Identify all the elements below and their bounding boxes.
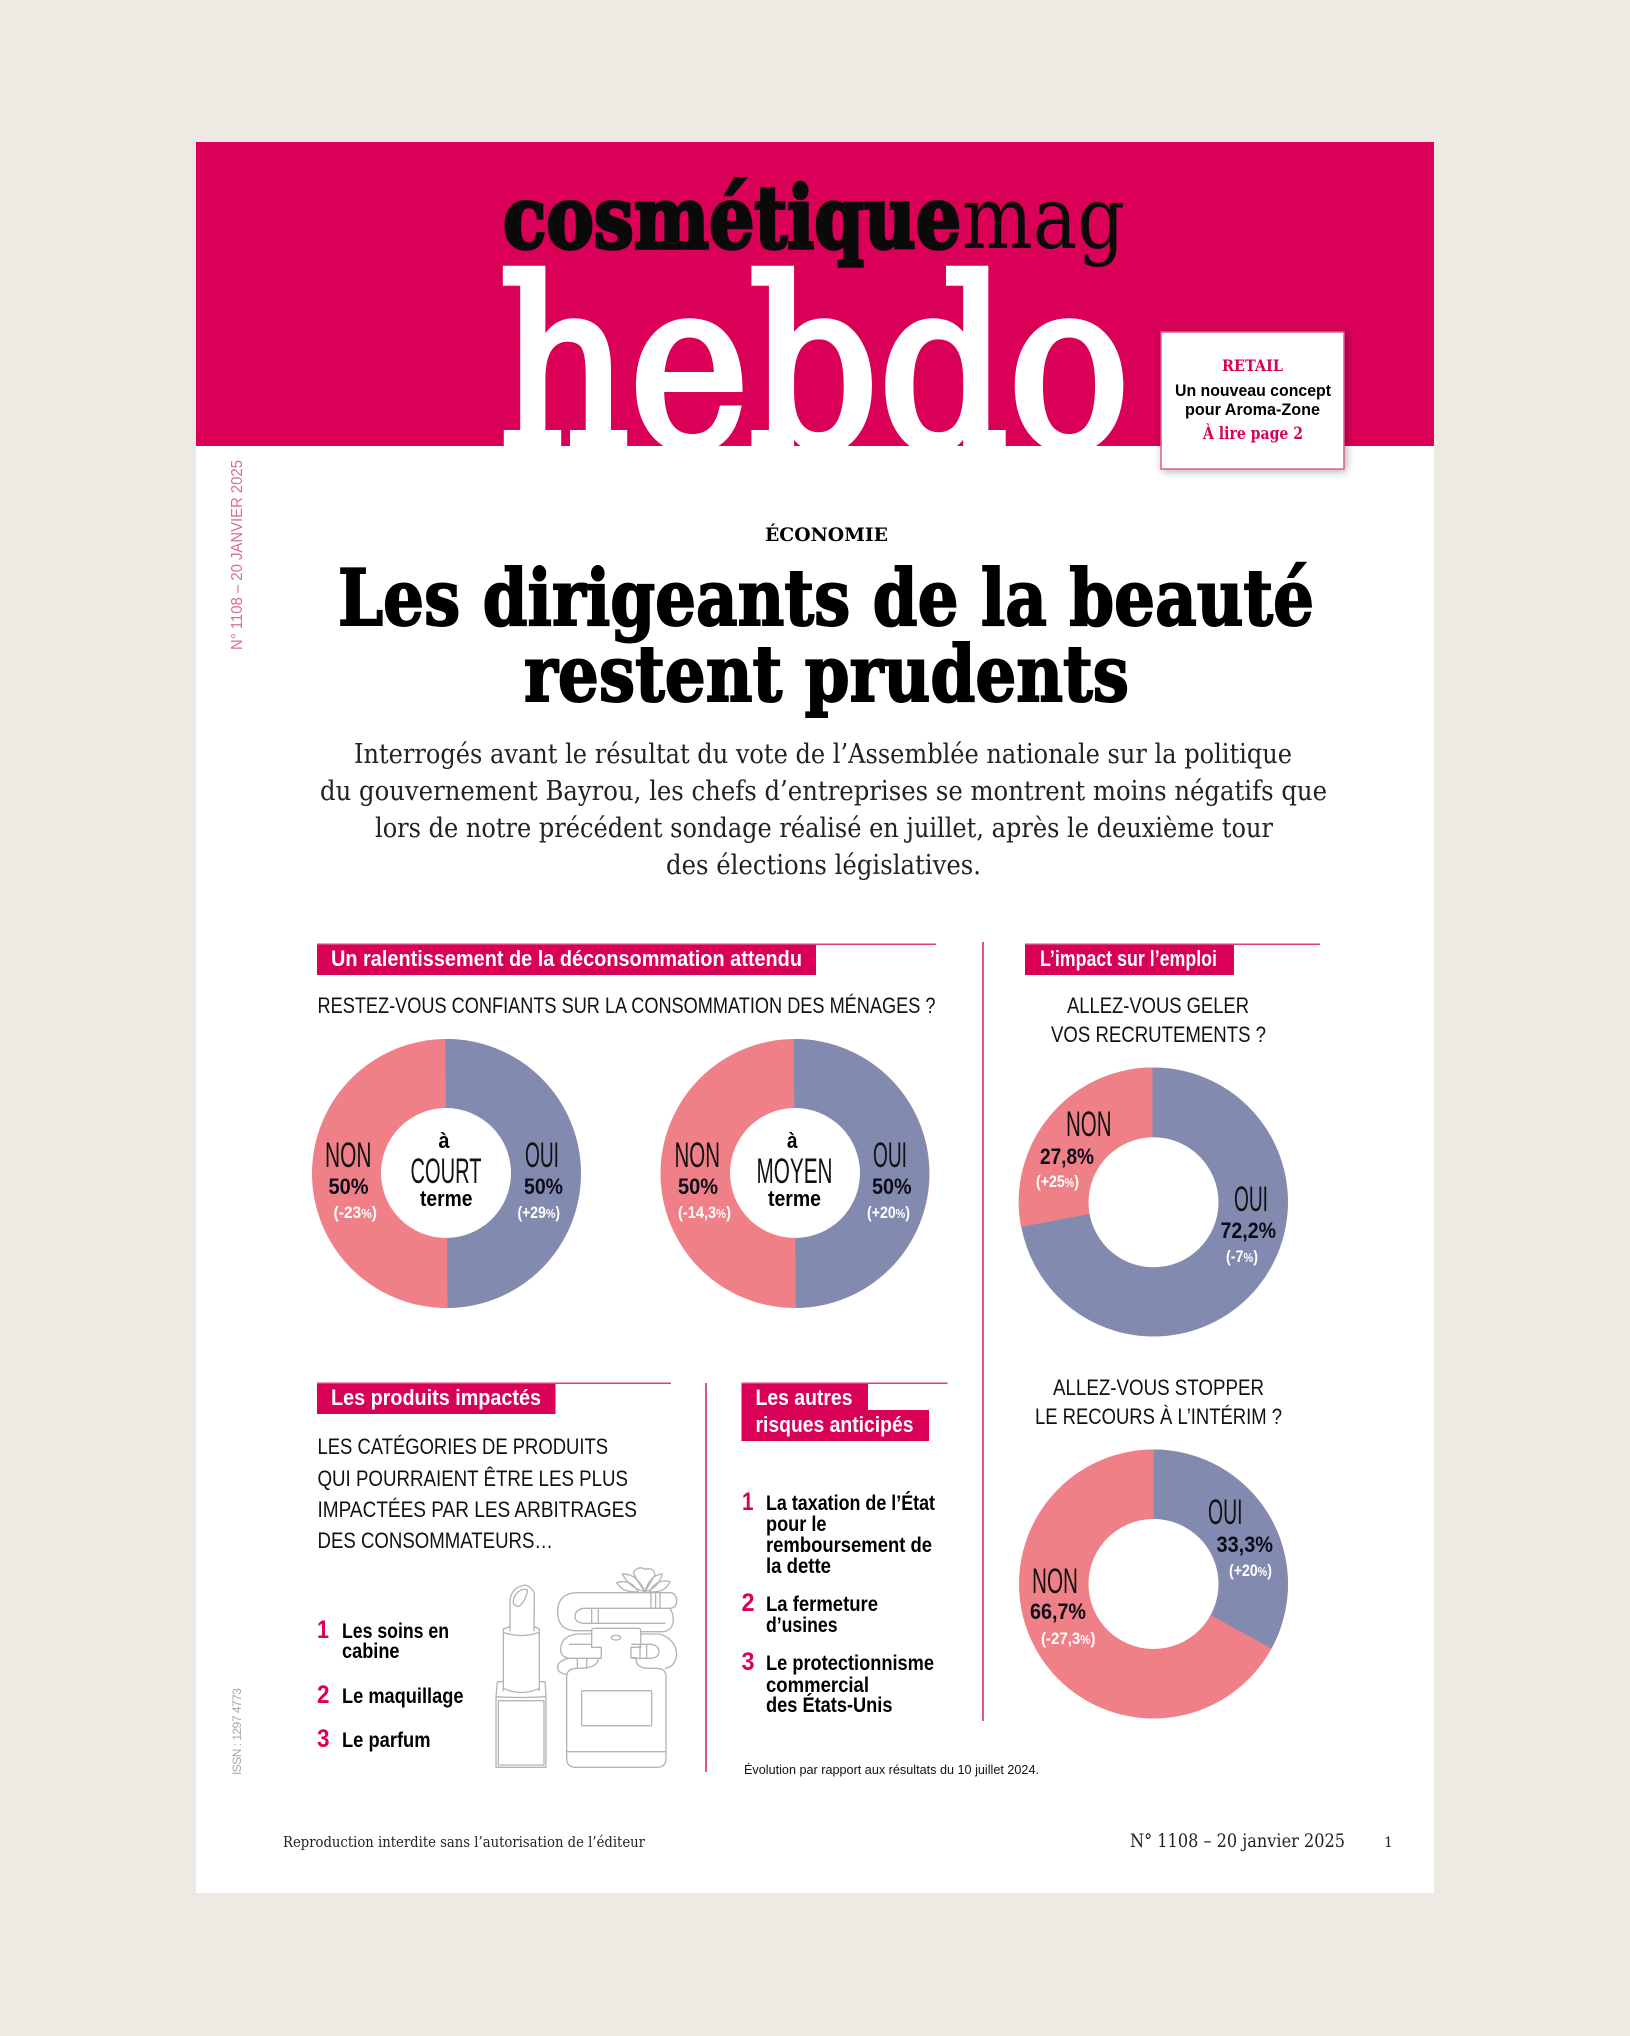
ranked list: produits: 3 [317, 1725, 330, 1753]
intro paragraph: des élections législatives. [666, 850, 981, 881]
donut chart: stopper intérim: 66,7% [1030, 1599, 1086, 1624]
donut chart: court terme: (-23%) [334, 1203, 377, 1222]
question: geler les recrutements: VOS RECRUTEMENTS ? [1051, 1022, 1266, 1047]
donut chart: moyen terme: NON [674, 1136, 720, 1175]
panel: autres risques [742, 1382, 948, 1717]
ranked list: risques: pour le [766, 1513, 826, 1536]
callout: retail teaser: Un nouveau concept [1175, 381, 1331, 400]
side text: issue date: N° 1108 – 20 JANVIER 2025 [229, 460, 246, 650]
callout: retail teaser: RETAIL [1222, 356, 1283, 375]
ranked list: risques: remboursement de [766, 1534, 932, 1557]
ranked list: produits: cabine [342, 1640, 400, 1663]
panel: déconsommation [312, 944, 936, 1308]
section heading: déconsommation: Un ralentissement de la déconsommation attendu [331, 946, 802, 971]
donut chart: geler recrutements [1019, 1068, 1288, 1336]
ranked list: risques: la dette [766, 1555, 831, 1578]
ranked list: produits: Le maquillage [342, 1685, 464, 1708]
section heading: risques: Les autres [756, 1385, 852, 1410]
question: stopper l'intérim: LE RECOURS À L’INTÉRIM ? [1035, 1404, 1282, 1429]
panel: magazine page [196, 142, 1434, 1893]
ranked list: risques: d’usines [766, 1614, 838, 1637]
intro paragraph: Interrogés avant le résultat du vote de l’Assemblée nationale sur la politique [354, 739, 1292, 770]
intro paragraph: lors de notre précédent sondage réalisé en juillet, après le deuxième tour [375, 813, 1273, 844]
side text: ISSN: ISSN : 1297 4773 [230, 1688, 244, 1775]
ranked list: risques [742, 1488, 935, 1717]
question: catégories de produits: IMPACTÉES PAR LES ARBITRAGES [318, 1497, 637, 1522]
ranked list: risques: 3 [742, 1648, 754, 1676]
donut chart: moyen terme: 50% [678, 1174, 718, 1199]
footer: issue and page number: 1 [1384, 1835, 1393, 1851]
section heading: produits [317, 1382, 671, 1414]
ranked list: produits: Le parfum [342, 1729, 430, 1752]
donut chart: stopper intérim: NON [1032, 1562, 1078, 1601]
question: consommation des ménages: RESTEZ-VOUS CONFIANTS SUR LA CONSOMMATION DES MÉNAGES ? [318, 993, 936, 1018]
donut chart: geler recrutements: 72,2% [1220, 1218, 1276, 1243]
section heading: emploi [1025, 944, 1320, 975]
question: stopper l'intérim [1035, 1375, 1282, 1429]
ranked list: risques: La taxation de l’État [766, 1492, 935, 1515]
donut chart: moyen terme: à [787, 1128, 798, 1153]
ranked list: produits: Les soins en [342, 1620, 449, 1643]
donut chart: geler recrutements: (-7%) [1226, 1247, 1258, 1266]
donut chart: court terme: 50% [328, 1174, 368, 1199]
ranked list: risques: 2 [742, 1589, 754, 1617]
donut chart: court terme: NON [325, 1136, 372, 1175]
donut chart: court terme: (+29%) [518, 1203, 560, 1222]
donut chart: moyen terme: terme [768, 1186, 821, 1211]
panel: produits impactés [317, 1382, 677, 1767]
ranked list: risques: 1 [742, 1488, 754, 1516]
section heading: produits: Les produits impactés [331, 1385, 541, 1410]
question: catégories de produits: DES CONSOMMATEURS… [318, 1528, 553, 1553]
donut chart: geler recrutements: OUI [1234, 1180, 1268, 1219]
donut chart: geler recrutements: (+25%) [1036, 1172, 1079, 1191]
question: geler les recrutements [1051, 993, 1266, 1047]
section heading: emploi: L’impact sur l’emploi [1040, 946, 1217, 971]
ranked list: risques: Le protectionnisme [766, 1652, 934, 1675]
donut chart: court terme: COURT [410, 1152, 482, 1191]
ranked list: produits [317, 1616, 464, 1753]
donut chart: court terme [312, 1039, 581, 1308]
donut chart: stopper intérim: (-27,3%) [1041, 1629, 1096, 1648]
footer: issue and page number: N° 1108 – 20 janvier 2025 [1130, 1830, 1345, 1852]
ranked list: risques: des États-Unis [766, 1694, 892, 1717]
logo: cosmétiquemag: cosmétique [503, 168, 961, 269]
ranked list: produits: 2 [317, 1681, 330, 1709]
donut chart: moyen terme: 50% [872, 1174, 912, 1199]
headline: Les dirigeants de la beauté [338, 553, 1314, 644]
donut chart: moyen terme: (-14,3%) [678, 1203, 731, 1222]
section heading: déconsommation [317, 944, 936, 975]
logo: hebdo: hebdo [499, 231, 1130, 501]
footnote: Évolution par rapport aux résultats du 10 juillet 2024. [744, 1762, 1039, 1777]
donut chart: moyen terme: OUI [873, 1136, 907, 1175]
section heading: risques [742, 1382, 948, 1441]
donut chart: geler recrutements: 27,8% [1040, 1144, 1094, 1169]
section heading: risques: risques anticipés [756, 1412, 914, 1437]
question: catégories de produits: LES CATÉGORIES DE PRODUITS [318, 1434, 608, 1459]
donut chart: stopper intérim: 33,3% [1216, 1532, 1273, 1557]
question: catégories de produits [318, 1434, 637, 1553]
masthead [196, 142, 1434, 501]
headline [338, 553, 1314, 720]
intro paragraph [320, 739, 1327, 881]
footer: copyright: Reproduction interdite sans l’autorisation de l’éditeur [283, 1833, 646, 1851]
callout: retail teaser: pour Aroma-Zone [1185, 400, 1320, 419]
ranked list: risques: commercial [766, 1674, 869, 1697]
donut chart: geler recrutements: NON [1066, 1105, 1112, 1144]
donut chart: moyen terme: (+20%) [867, 1203, 910, 1222]
donut chart: stopper intérim: (+20%) [1229, 1561, 1272, 1580]
question: geler les recrutements: ALLEZ-VOUS GELER [1067, 993, 1249, 1018]
donut chart: court terme: OUI [525, 1136, 559, 1175]
donut chart: stopper intérim [1019, 1450, 1288, 1718]
intro paragraph: du gouvernement Bayrou, les chefs d’entreprises se montrent moins négatifs que [320, 776, 1327, 807]
ranked list: produits: 1 [317, 1616, 329, 1644]
callout: retail teaser: À lire page 2 [1202, 423, 1303, 444]
callout: retail teaser [1161, 332, 1344, 469]
question: stopper l'intérim: ALLEZ-VOUS STOPPER [1053, 1375, 1264, 1400]
donut chart: court terme: 50% [524, 1174, 563, 1199]
donut chart: court terme: terme [420, 1186, 472, 1211]
headline: restent prudents [524, 629, 1129, 720]
donut chart: stopper intérim: OUI [1208, 1493, 1242, 1532]
question: catégories de produits: QUI POURRAIENT ÊTRE LES PLUS [318, 1466, 628, 1491]
panel: impact sur l'emploi [1019, 944, 1320, 1718]
logo: cosmétiquemag: mag [962, 169, 1125, 269]
donut chart: court terme: à [438, 1128, 450, 1153]
ranked list: risques: La fermeture [766, 1593, 878, 1616]
kicker: économie: ÉCONOMIE [765, 523, 888, 546]
donut chart: moyen terme: MOYEN [756, 1152, 832, 1191]
icon: lipstick [496, 1585, 546, 1767]
icon: perfume and towels [558, 1568, 677, 1767]
donut chart: moyen terme [660, 1039, 930, 1308]
